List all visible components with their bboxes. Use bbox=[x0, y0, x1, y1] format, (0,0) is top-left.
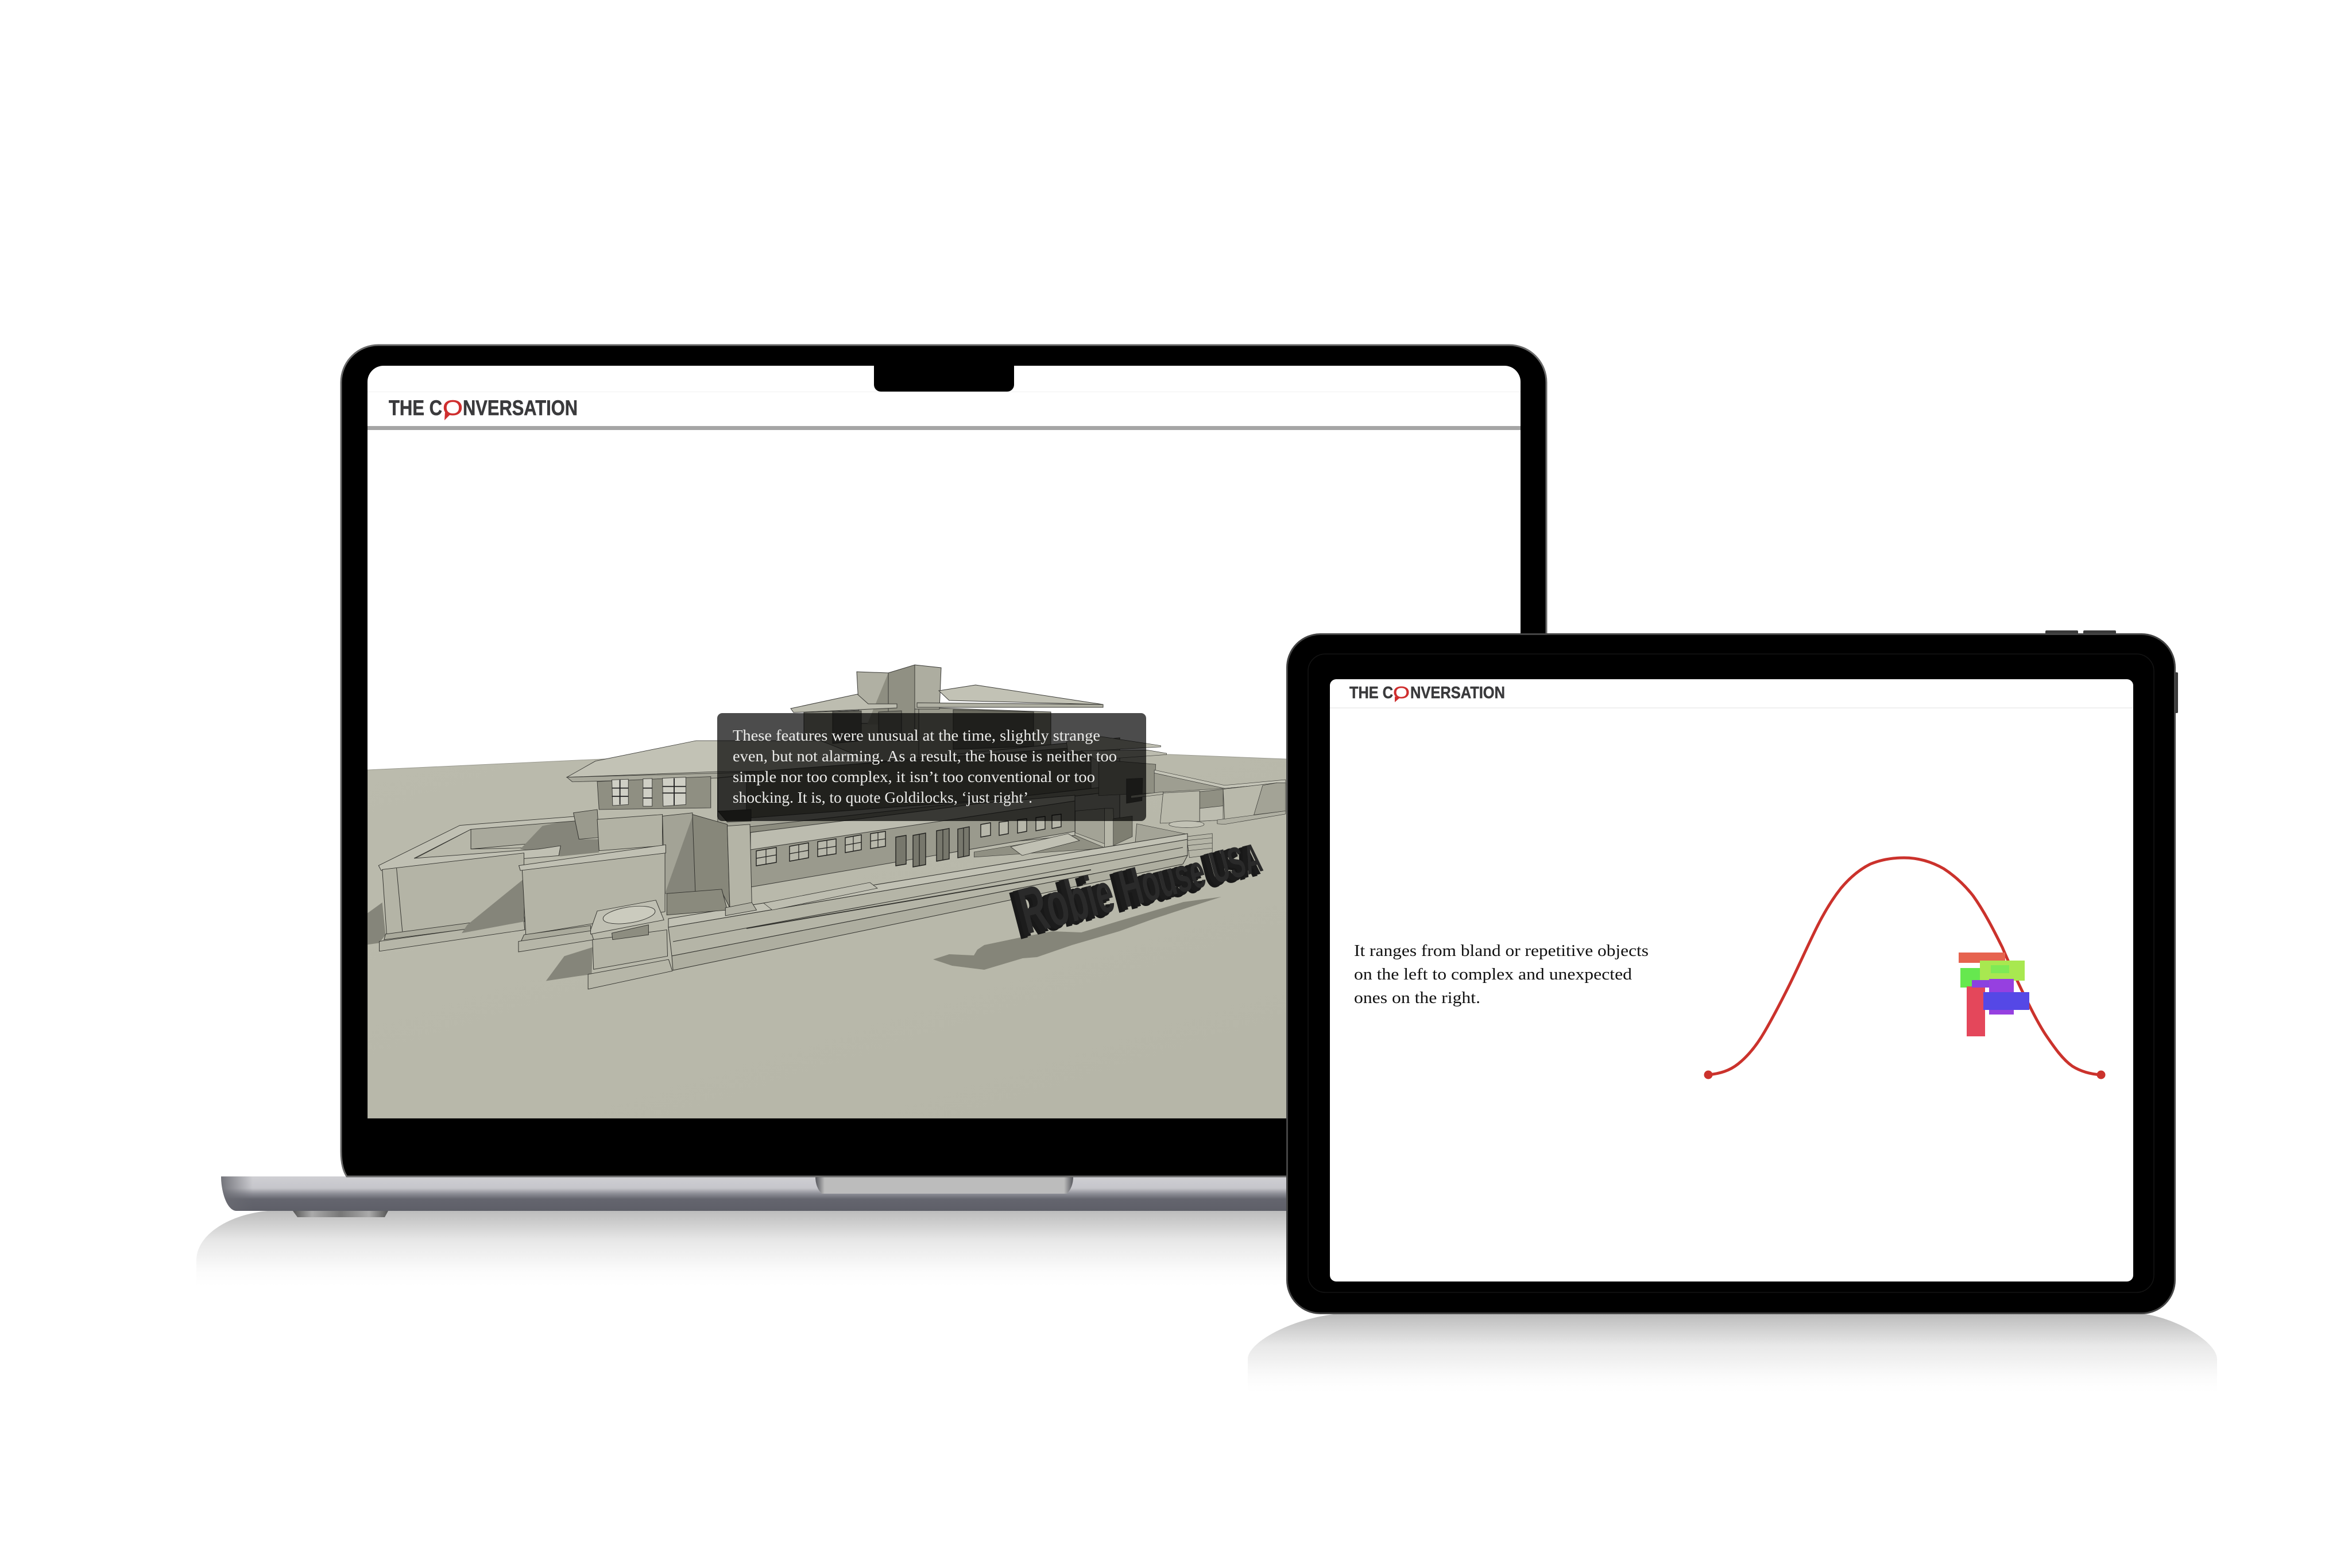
laptop hinge notch bbox=[815, 1176, 1073, 1194]
west wing roof bbox=[567, 741, 894, 810]
main house body bbox=[718, 738, 1120, 887]
upper storey and chimney bbox=[790, 664, 1104, 762]
tablet inner bezel line bbox=[1308, 654, 2154, 1292]
caption text bbox=[733, 726, 1117, 806]
tablet shadow bbox=[1248, 1314, 2217, 1392]
tablet bbox=[1287, 630, 2178, 1314]
logo: The Conversation (laptop) bbox=[389, 396, 578, 420]
caption box bbox=[717, 713, 1146, 821]
windows of west wing bbox=[612, 777, 686, 806]
logo: The Conversation (tablet): THE C bbox=[1349, 684, 1393, 702]
logo: The Conversation (tablet): NVERSATION bbox=[1410, 684, 1505, 702]
caption text: even, but not alarming. As a result, the house is neither too bbox=[733, 747, 1117, 765]
laptop shadow bbox=[196, 1211, 1321, 1286]
logo: The Conversation (tablet) bbox=[1349, 684, 1505, 702]
text shadow on the ground bbox=[933, 897, 1221, 970]
3D label: Robie House, USA: Robie House USA bbox=[1004, 818, 1260, 952]
laptop lid bbox=[341, 345, 1546, 1176]
laptop camera notch bbox=[874, 366, 1014, 392]
laptop header: faint divider and grey rule bbox=[368, 392, 1521, 430]
tablet body bbox=[1287, 634, 2175, 1314]
3D label: Robie House, USA: Robie House USA bbox=[1008, 816, 1264, 950]
3D scene: Robie House model bbox=[368, 664, 1286, 1118]
logo: The Conversation (laptop): THE C bbox=[389, 396, 442, 420]
far east wing and terrace bbox=[974, 737, 1286, 858]
logo: The Conversation (laptop): NVERSATION bbox=[463, 396, 578, 420]
logo: The Conversation (tablet): O bbox=[1393, 684, 1410, 702]
tablet screen bbox=[1330, 679, 2133, 1281]
small fountain bbox=[1169, 821, 1204, 827]
body text bbox=[1354, 942, 1649, 1007]
tablet buttons bbox=[2045, 630, 2178, 713]
caption text: simple nor too complex, it isn’t too conventional or too bbox=[733, 768, 1095, 785]
body text: ones on the right. bbox=[1354, 989, 1480, 1007]
caption text: shocking. It is, to quote Goldilocks, ‘just right’. bbox=[733, 788, 1032, 806]
coloured block figure bbox=[1959, 953, 2029, 1036]
logo: The Conversation (laptop): O bbox=[443, 396, 463, 420]
ground plane bbox=[368, 754, 1286, 1118]
caption text: These features were unusual at the time, slightly strange bbox=[733, 726, 1100, 744]
3D label: Robie House, USA: Robie House USA bbox=[1012, 814, 1268, 948]
long terrace wall bbox=[668, 834, 1187, 970]
ground floor windows bbox=[756, 814, 1061, 867]
laptop base bbox=[221, 1176, 1321, 1217]
west terrace walls and fountain bbox=[368, 810, 757, 989]
bell curve chart bbox=[1704, 858, 2105, 1079]
laptop screen bbox=[368, 366, 1550, 1118]
laptop foot bbox=[293, 1211, 388, 1217]
curve end points bbox=[1704, 1070, 2105, 1079]
body text: It ranges from bland or repetitive objects bbox=[1354, 942, 1649, 960]
body text: on the left to complex and unexpected bbox=[1354, 965, 1633, 984]
